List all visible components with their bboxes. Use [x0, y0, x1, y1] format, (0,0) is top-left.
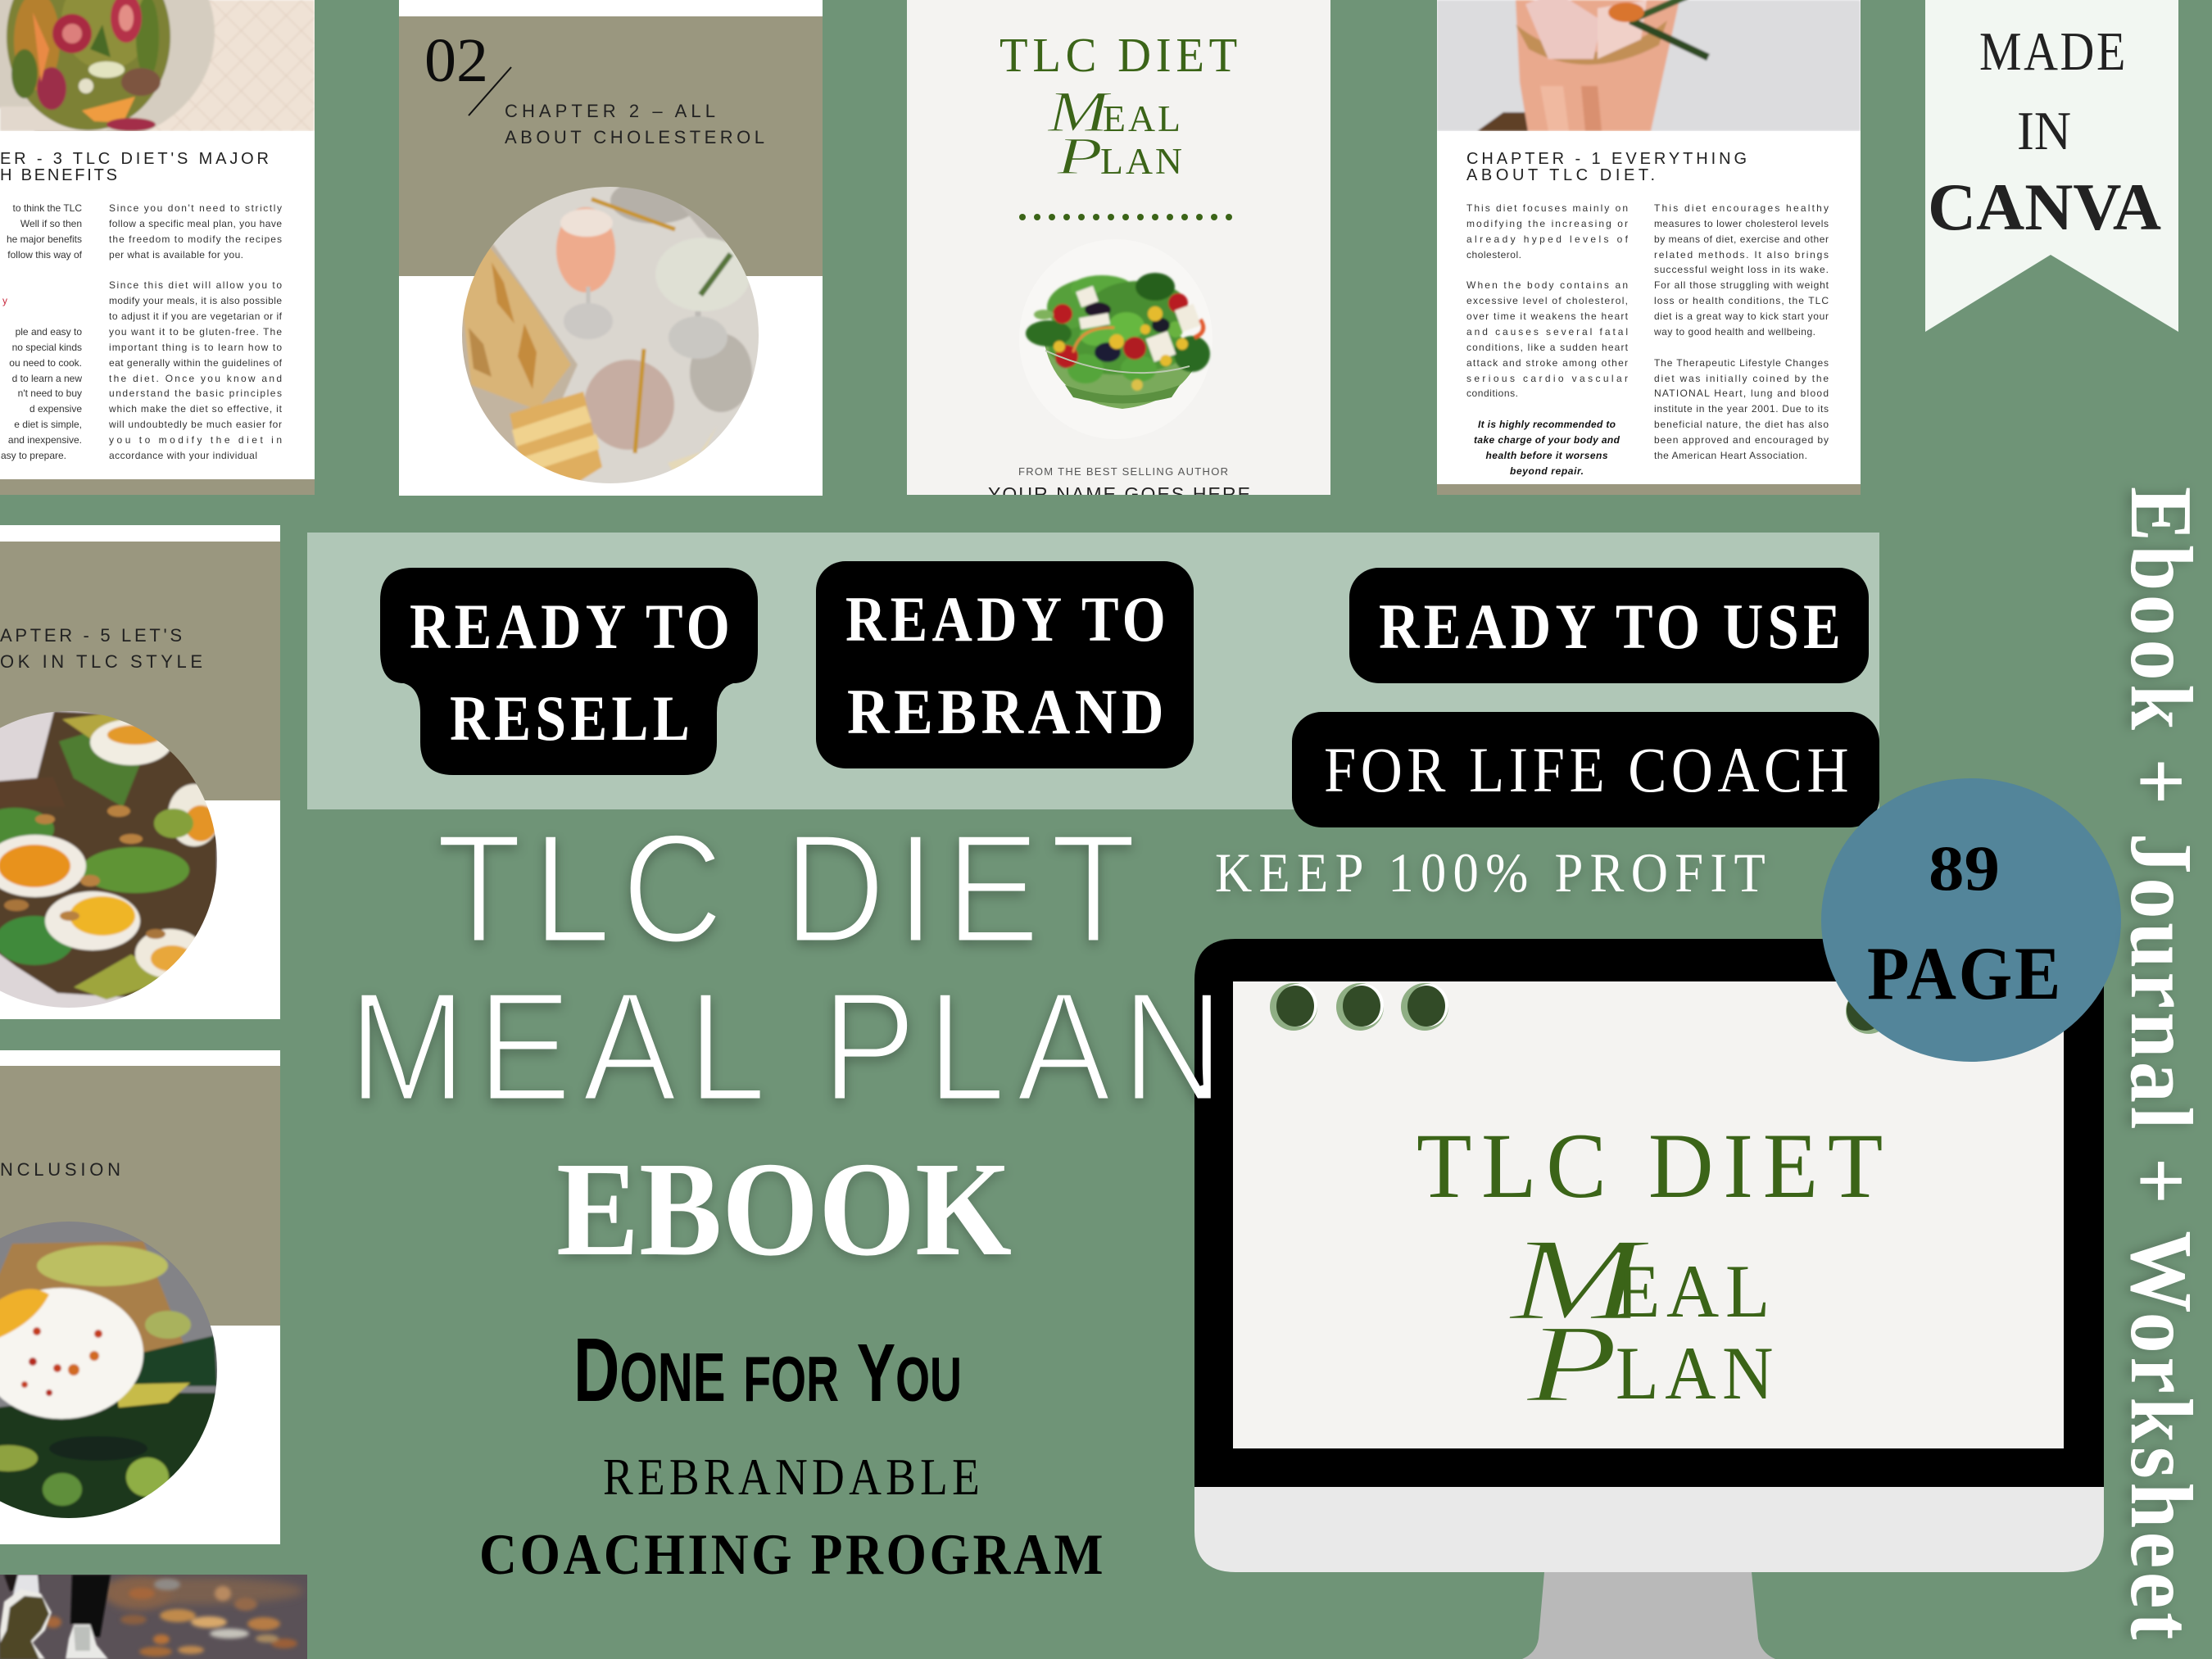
- monitor chin: [1194, 1483, 2104, 1572]
- body text columns: modifying the increasing or: [1466, 218, 1628, 229]
- body text columns: It is highly recommended to: [1478, 419, 1616, 430]
- body text columns: will undoubtedly be much easier for: [108, 419, 282, 430]
- body text columns: Since this diet will allow you to: [109, 279, 282, 291]
- heading: [1466, 150, 1747, 184]
- screen title: M: [1507, 1215, 1651, 1345]
- badge: ready to rebrand: [816, 561, 1194, 768]
- monitor screen: [1233, 981, 2064, 1448]
- body text columns: no special kinds: [12, 342, 82, 353]
- photo: running shoes on path: [0, 1575, 307, 1659]
- body text columns: per what is available for you.: [109, 249, 243, 261]
- icon: salad bowl: [1019, 239, 1213, 439]
- body text columns: to adjust it if you are vegetarian or if: [109, 310, 283, 322]
- body text columns: [1466, 202, 1829, 477]
- body text columns: modify your meals, it is also possible: [109, 295, 282, 306]
- body text columns: conditions.: [1466, 388, 1518, 399]
- chapter number: 02: [424, 26, 488, 95]
- body text columns: When the body contains an: [1466, 279, 1628, 291]
- body text columns: you want it to be gluten-free. The: [109, 326, 282, 338]
- body text columns: way to good health and wellbeing.: [1653, 326, 1815, 338]
- body text columns: n't need to buy: [18, 388, 82, 399]
- monitor bezel: [1194, 939, 2104, 1487]
- badge: ready to rebrand: REBRAND: [847, 676, 1168, 747]
- chapter title: [0, 625, 202, 672]
- photo: iced drink: [1437, 0, 1861, 131]
- body text columns: over time it weakens the heart: [1466, 310, 1629, 322]
- window dots: [1270, 983, 1892, 1034]
- body text columns: understand the basic principles: [109, 388, 282, 399]
- ribbon: made in canva: IN: [2017, 101, 2071, 161]
- body text columns: and causes several fatal: [1466, 326, 1628, 338]
- screen title: P: [1525, 1303, 1618, 1426]
- body text columns: This diet encourages healthy: [1654, 202, 1829, 214]
- heading: ABOUT TLC DIET.: [1466, 166, 1655, 184]
- body text columns: which make the diet so effective, it: [108, 403, 283, 415]
- body text columns: by means of diet, exercise and other: [1654, 233, 1829, 245]
- body text columns: e diet is simple,: [14, 419, 82, 430]
- heading: H BENEFITS: [0, 166, 117, 184]
- heading: ebook: EBOOK: [556, 1134, 1012, 1284]
- photo: bread and glasses: [459, 178, 762, 487]
- body text columns: excessive level of cholesterol,: [1466, 295, 1628, 306]
- badge: ready to resell: READY TO: [410, 591, 734, 662]
- cover title: P: [1056, 127, 1103, 186]
- ribbon: made in canva: CANVA: [1928, 170, 2161, 244]
- body text columns: ple and easy to: [16, 326, 82, 338]
- ribbon: made in canva: MADE: [1979, 21, 2128, 82]
- badge: ready to resell: [380, 568, 758, 775]
- body text columns: and inexpensive.: [8, 434, 82, 446]
- photo: avocado toast and eggs: [0, 709, 221, 1012]
- monitor mockup: [1194, 939, 2104, 1659]
- heading: [0, 150, 269, 184]
- body text columns: diet was initially coined by the: [1654, 373, 1829, 384]
- badge: 89 page: PAGE: [1867, 931, 2063, 1015]
- text: rebrandable: REBRANDABLE: [603, 1448, 984, 1506]
- body text columns: diet is a great way to kick start your: [1654, 310, 1829, 322]
- main title: tlc diet meal plan: MEAL PLAN: [348, 960, 1235, 1134]
- slash: [469, 67, 511, 116]
- body text columns: The Therapeutic Lifestyle Changes: [1654, 357, 1829, 369]
- chapter title: ABOUT CHOLESTEROL: [505, 127, 764, 147]
- chapter title: OK IN TLC STYLE: [0, 651, 202, 672]
- chapter title: CHAPTER 2 – ALL: [505, 101, 715, 121]
- band: selling points background: [307, 533, 1879, 809]
- chapter title: NCLUSION: [0, 1159, 120, 1180]
- panel: conclusion page: [0, 1050, 280, 1544]
- panel: ebook cover page: [907, 0, 1330, 505]
- heading: CHAPTER - 1 EVERYTHING: [1466, 150, 1747, 168]
- body text columns: serious cardio vascular: [1466, 373, 1628, 384]
- body text columns: important thing is to learn how to: [109, 342, 282, 353]
- photo: poached egg on toast: [0, 1219, 221, 1522]
- body text columns: d expensive: [29, 403, 82, 415]
- screen title: EAL: [1616, 1249, 1776, 1333]
- body text columns: cholesterol.: [1466, 249, 1521, 261]
- panel: chapter 1 page: [1437, 0, 1861, 495]
- text: coaching program: COACHING PROGRAM: [479, 1523, 1106, 1587]
- screen title: TLC DIET: [1416, 1115, 1892, 1217]
- screen title: [1416, 1115, 1892, 1426]
- body text columns: ou need to cook.: [9, 357, 82, 369]
- badge: for life coach: [1292, 712, 1879, 827]
- panel: chapter 2 page: [399, 0, 823, 496]
- body text columns: beyond repair.: [1510, 465, 1584, 477]
- body text columns: follow this way of: [7, 249, 83, 261]
- body text columns: beneficial nature, the diet has also: [1654, 419, 1829, 430]
- body text columns: been approved and encouraged by: [1654, 434, 1829, 446]
- cover title: [999, 28, 1242, 186]
- cover title: M: [1047, 80, 1113, 144]
- body text columns: Well if so then: [20, 218, 82, 229]
- badge: 89 page: [1821, 778, 2121, 1062]
- ribbon: made in canva: [1925, 0, 2178, 332]
- badge: ready to use: READY TO USE: [1379, 591, 1845, 662]
- body text columns: take charge of your body and: [1474, 434, 1620, 446]
- body text columns: d to learn a new: [12, 373, 82, 384]
- heading: ER - 3 TLC DIET'S MAJOR: [0, 150, 269, 168]
- body text columns: successful weight loss in its wake.: [1654, 264, 1829, 275]
- body text columns: attack and stroke among other: [1466, 357, 1628, 369]
- text: keep 100% profit: KEEP 100% PROFIT: [1215, 841, 1772, 904]
- monitor stand: [1522, 1572, 1775, 1659]
- body text columns: measures to lower cholesterol levels: [1654, 218, 1829, 229]
- body text columns: accordance with your individual: [109, 450, 257, 461]
- main title: tlc diet meal plan: TLC DIET: [436, 802, 1147, 976]
- main title: tlc diet meal plan: [348, 802, 1235, 1134]
- body text columns: eat generally within the guidelines of: [109, 357, 283, 369]
- body text columns: the freedom to modify the recipes: [109, 233, 282, 245]
- text: done for you: DONE FOR YOU: [573, 1320, 962, 1421]
- body text columns: y: [2, 295, 7, 306]
- badge: ready to rebrand: READY TO: [845, 583, 1170, 655]
- screen title: LAN: [1616, 1331, 1779, 1415]
- panel: chapter 3 page: [0, 0, 315, 495]
- dotted divider: [1019, 214, 1232, 220]
- cover title: LAN: [1100, 141, 1185, 182]
- body text columns: to think the TLC: [13, 202, 82, 214]
- badge: for life coach: FOR LIFE COACH: [1324, 734, 1853, 805]
- cover title: TLC DIET: [999, 28, 1242, 82]
- body text columns: the diet. Once you know and: [109, 373, 282, 384]
- body text columns: [1, 202, 283, 461]
- body text columns: follow a specific meal plan, you have: [109, 218, 282, 229]
- author line: FROM THE BEST SELLING AUTHOR: [1018, 465, 1228, 478]
- body text columns: Since you don't need to strictly: [109, 202, 282, 214]
- body text columns: the American Heart Association.: [1654, 450, 1807, 461]
- body text columns: conditions, like a sudden heart: [1466, 342, 1629, 353]
- badge: ready to use: [1349, 568, 1869, 683]
- body text columns: This diet focuses mainly on: [1466, 202, 1628, 214]
- body text columns: already hyped levels of: [1466, 233, 1629, 245]
- body text columns: he major benefits: [7, 233, 82, 245]
- author name: YOUR NAME GOES HERE: [988, 483, 1250, 505]
- body text columns: loss or health conditions, the TLC: [1654, 295, 1829, 306]
- cover title: EAL: [1103, 98, 1183, 139]
- chapter title: [505, 101, 764, 147]
- badge: ready to resell: RESELL: [450, 682, 694, 754]
- panel: chapter 5 page: [0, 525, 280, 1019]
- photo: salad plate: [0, 0, 315, 143]
- chapter title: APTER - 5 LET'S: [0, 625, 182, 646]
- body text columns: health before it worsens: [1486, 450, 1608, 461]
- body text columns: For all those struggling with weight: [1654, 279, 1829, 291]
- badge: 89 page: 89: [1929, 832, 2000, 904]
- body text columns: asy to prepare.: [1, 450, 66, 461]
- body text columns: related methods. It also brings: [1654, 249, 1829, 261]
- body text columns: NATIONAL Heart, lung and blood: [1654, 388, 1829, 399]
- body text columns: you to modify the diet in: [109, 434, 282, 446]
- body text columns: institute in the year 2001. Due to its: [1654, 403, 1829, 415]
